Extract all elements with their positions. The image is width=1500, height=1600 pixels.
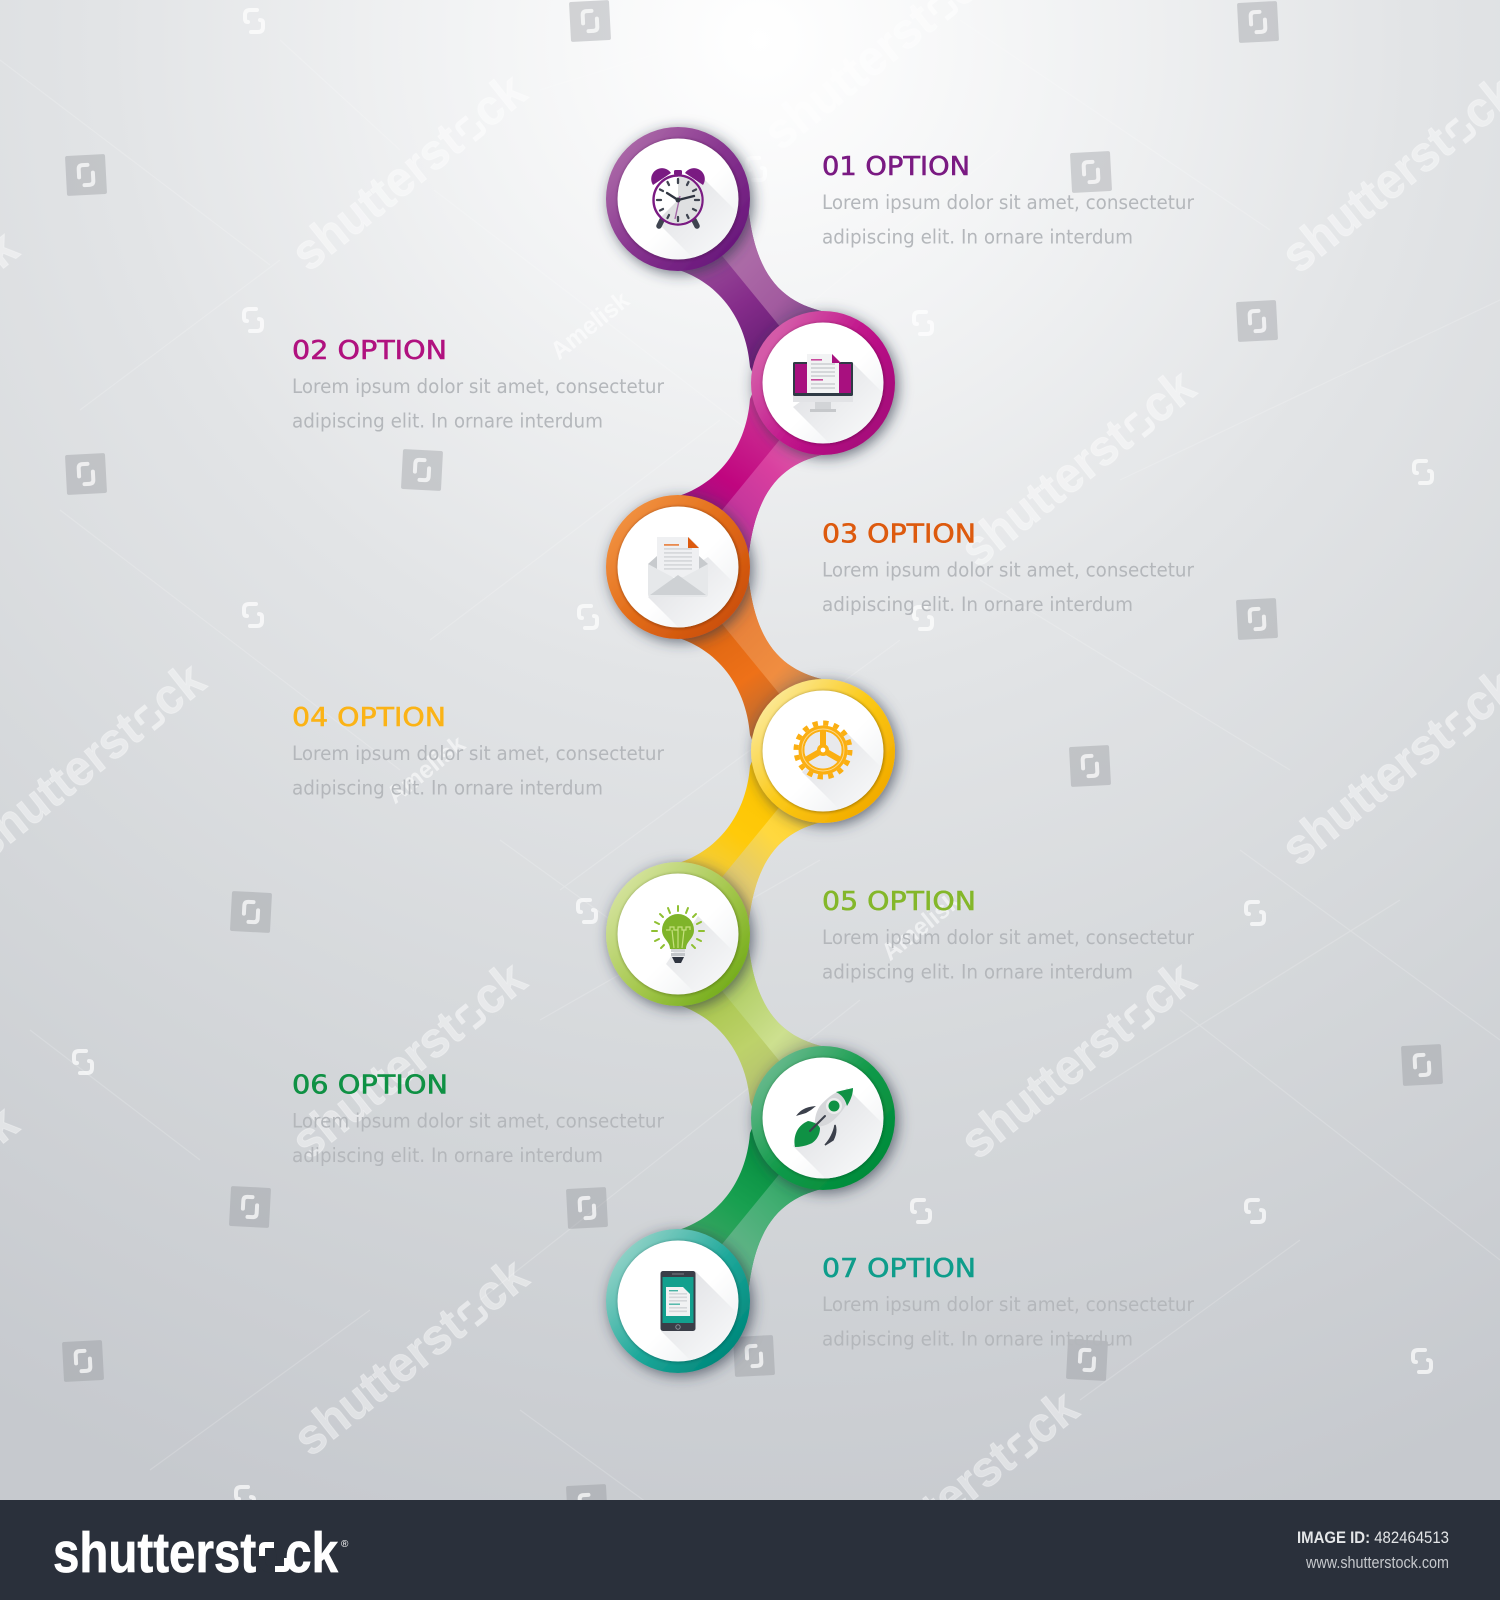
- text: 01 option: Lorem ipsum dolor sit amet, consectetur: [822, 191, 1195, 214]
- text: 01 option: 01 OPTION: [822, 152, 970, 182]
- node 6: green rocket: [744, 1039, 908, 1203]
- node 2: magenta monitor: [744, 304, 908, 468]
- text: 03 option: [822, 520, 1195, 616]
- watermark layer: Amelisk: [545, 286, 635, 365]
- text: 06 option: 06 OPTION: [292, 1070, 448, 1100]
- text: 04 option: Lorem ipsum dolor sit amet, consectetur: [292, 742, 665, 765]
- text: 02 option: [292, 336, 665, 433]
- text: 05 option: 05 OPTION: [822, 887, 976, 917]
- watermark layer: Amelisk: [381, 730, 471, 809]
- connector: orange 3 to 4: [680, 579, 822, 740]
- text: 07 option: [822, 1254, 1195, 1351]
- connector: green 6 to 7: [680, 1128, 819, 1288]
- footer logo: shutterstock: [53, 1521, 338, 1585]
- node 5: lime bulb: [599, 855, 763, 1019]
- text: 03 option: adipiscing elit. In ornare interdum: [822, 593, 1133, 616]
- text: 07 option: Lorem ipsum dolor sit amet, consectetur: [822, 1293, 1195, 1316]
- icon: alarm clock: [651, 168, 705, 226]
- connector: magenta 2 to 3: [680, 394, 822, 555]
- text: 01 option: adipiscing elit. In ornare interdum: [822, 226, 1133, 249]
- text: 02 option: adipiscing elit. In ornare interdum: [292, 410, 603, 433]
- footer image id: IMAGE ID: 482464513: [1297, 1528, 1449, 1547]
- watermark layer: shutterstock: [950, 950, 1205, 1169]
- text: 06 option: adipiscing elit. In ornare interdum: [292, 1144, 603, 1167]
- connector: lime 5 to 6: [681, 946, 822, 1106]
- text: 06 option: [292, 1070, 665, 1167]
- node 3: orange envelope: [599, 488, 763, 652]
- text: 04 option: 04 OPTION: [292, 703, 446, 733]
- icon: envelope with letter: [648, 537, 708, 597]
- node 7: teal phone: [599, 1222, 763, 1386]
- watermark layer: shutterstock: [833, 1379, 1088, 1598]
- text: 07 option: 07 OPTION: [822, 1254, 976, 1284]
- text: 04 option: [292, 703, 665, 800]
- connector: yellow 4 to 5: [680, 762, 819, 922]
- text: 04 option: adipiscing elit. In ornare interdum: [292, 777, 603, 800]
- text: 05 option: adipiscing elit. In ornare interdum: [822, 961, 1133, 984]
- icon: smartphone: [660, 1271, 696, 1331]
- watermark layer: Amelisk: [876, 887, 966, 966]
- watermark layer: shutterstock: [950, 358, 1205, 577]
- watermark layer: shutterstock: [281, 62, 536, 281]
- footer logo: ®: [341, 1539, 349, 1550]
- text: 03 option: 03 OPTION: [822, 520, 976, 550]
- text: 02 option: 02 OPTION: [292, 336, 447, 366]
- icon: light bulb: [652, 906, 704, 963]
- connector: purple 1 to 2: [680, 212, 822, 372]
- watermark layer: shutterstock: [281, 950, 536, 1169]
- footer bar: [0, 1500, 1500, 1600]
- node 1: purple clock: [598, 120, 764, 284]
- text: 02 option: Lorem ipsum dolor sit amet, consectetur: [292, 375, 665, 398]
- option text blocks: [292, 152, 1195, 1351]
- text: 05 option: Lorem ipsum dolor sit amet, consectetur: [822, 926, 1195, 949]
- text: 03 option: Lorem ipsum dolor sit amet, consectetur: [822, 558, 1195, 582]
- text: 07 option: adipiscing elit. In ornare interdum: [822, 1328, 1133, 1351]
- text: 06 option: Lorem ipsum dolor sit amet, consectetur: [292, 1110, 665, 1132]
- footer url: www.shutterstock.com: [1305, 1554, 1449, 1572]
- icon: gear: [796, 723, 850, 777]
- text: 05 option: [822, 887, 1195, 984]
- text: 01 option: [822, 152, 1195, 249]
- node 4: yellow gear: [744, 672, 908, 836]
- watermark layer: shutterstock: [283, 1247, 538, 1466]
- icon: monitor with document: [793, 354, 853, 412]
- icon: rocket with leaf flame: [794, 1088, 853, 1147]
